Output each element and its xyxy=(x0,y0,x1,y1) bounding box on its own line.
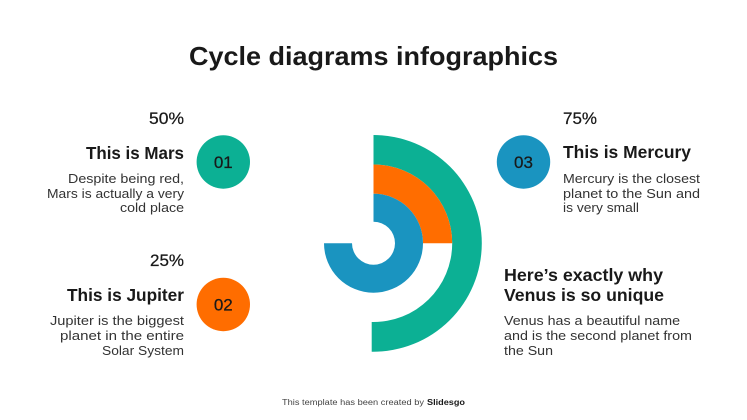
ring: blue three-quarter arc xyxy=(324,194,423,293)
Mercury description: is very small xyxy=(563,201,639,215)
badge 03: 03 xyxy=(514,153,533,172)
Mercury heading: This is Mercury xyxy=(563,142,691,162)
Mars description xyxy=(47,172,185,215)
badge 02 xyxy=(197,278,250,331)
title: Cycle diagrams infographics xyxy=(189,41,558,71)
ring: orange quarter arc xyxy=(374,164,452,243)
block: Mercury xyxy=(563,109,701,215)
badge 03 xyxy=(497,135,550,189)
badge 01 xyxy=(197,135,250,189)
ring: teal outer arc xyxy=(372,135,482,352)
cycle diagram xyxy=(324,135,482,352)
Jupiter percentage: 25% xyxy=(150,251,184,270)
Jupiter description: Jupiter is the biggest xyxy=(50,314,185,328)
footer credit xyxy=(282,398,465,407)
Jupiter description: planet in the entire xyxy=(60,329,184,343)
Jupiter heading: This is Jupiter xyxy=(67,285,184,305)
Mars description: cold place xyxy=(120,201,184,215)
Venus description: the Sun xyxy=(504,344,553,358)
footer credit: Slidesgo xyxy=(427,398,465,407)
block: Mars xyxy=(47,109,185,215)
block: Venus xyxy=(504,265,692,358)
Mercury percentage: 75% xyxy=(563,109,597,128)
Mars description: Despite being red, xyxy=(68,172,184,186)
Jupiter description: Solar System xyxy=(102,344,184,358)
Mars percentage: 50% xyxy=(149,109,184,128)
Mars description: Mars is actually a very xyxy=(47,187,185,201)
Venus heading: Here’s exactly why xyxy=(504,265,663,285)
badge 02: 02 xyxy=(214,296,233,314)
footer credit: This template has been created by xyxy=(282,398,424,407)
Venus description: and is the second planet from xyxy=(504,329,692,343)
badge 01: 01 xyxy=(214,153,233,172)
block: Jupiter xyxy=(50,251,185,358)
Jupiter description xyxy=(50,314,185,358)
Mercury description: planet to the Sun and xyxy=(563,187,700,201)
Mercury description xyxy=(563,172,701,215)
Venus heading: Venus is so unique xyxy=(504,285,664,305)
Venus heading xyxy=(504,265,664,305)
Venus description xyxy=(504,314,692,358)
Mars heading: This is Mars xyxy=(86,143,184,163)
Venus description: Venus has a beautiful name xyxy=(504,314,680,328)
Mercury description: Mercury is the closest xyxy=(563,172,701,186)
